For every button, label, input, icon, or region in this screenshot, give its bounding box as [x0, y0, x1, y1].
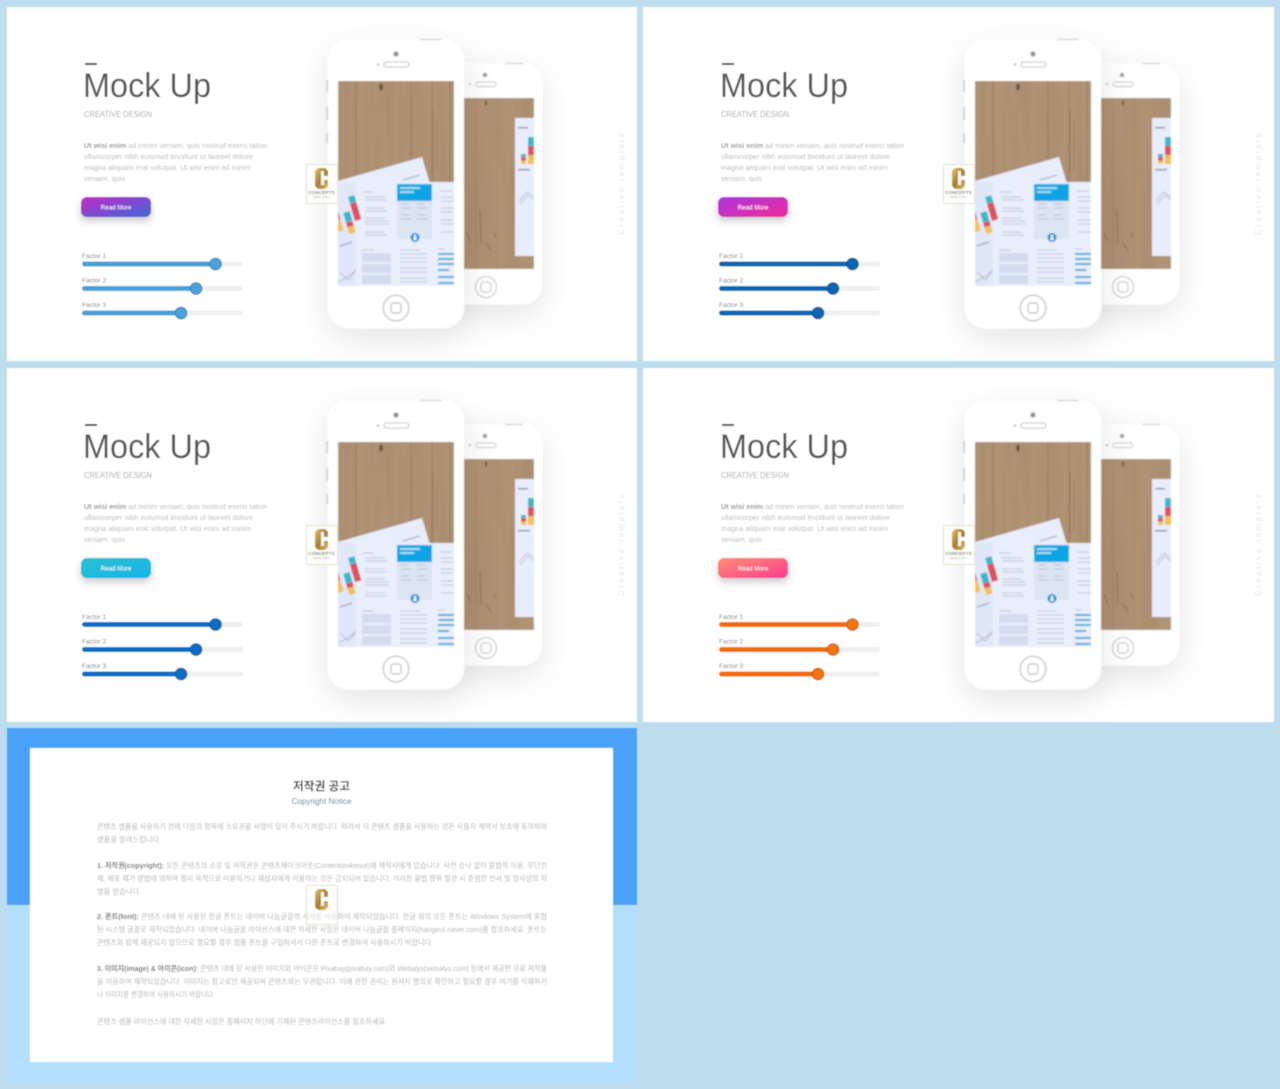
body text: veniam, quis	[721, 174, 762, 183]
slider: factor 3	[719, 302, 880, 319]
button: read more: Read More	[101, 204, 132, 212]
panel: slide 2 magenta	[643, 7, 1274, 361]
title accent dash	[85, 63, 97, 65]
button: read more	[718, 558, 788, 578]
intro paragraph: 샘플을 알려드립니다.	[97, 835, 161, 844]
slider: factor 2: Factor 2	[82, 638, 107, 646]
slider: factor 2: Factor 2	[82, 278, 107, 284]
panel: copyright notice	[7, 728, 637, 1083]
intro paragraph: 콘텐츠 샘플을 사용하기 전에 다음의 항목에 소유권을 사항이 있어 주시기 바랍니다. 따라서 이 콘텐츠 샘플을 사용하는 것은 사용자 계약서 보호에 동의하며	[97, 822, 547, 831]
slider: factor 3: Factor 3	[82, 663, 107, 670]
body text: veniam, quis	[84, 174, 125, 183]
notice subtitle: Copyright Notice	[292, 796, 352, 806]
body text: ullamcorper nibh euismod tincidunt ut laoreet dolore	[721, 152, 890, 161]
subtitle: CREATIVE DESIGN	[721, 470, 789, 480]
logo watermark: CONCEPTS	[308, 190, 336, 196]
panel: slide 4 orange	[643, 368, 1274, 722]
slider: factor 1: Factor 1	[82, 253, 107, 260]
body text: magna aliquam erat volutpat. Ut wisi enim ad minim	[721, 163, 888, 172]
subtitle: CREATIVE DESIGN	[721, 109, 789, 119]
button: read more: Read More	[101, 566, 132, 572]
phone mockups	[327, 39, 542, 328]
section 1: copyright	[97, 861, 547, 896]
logo watermark	[944, 164, 974, 204]
body text: Ut wisi enim ad minim veniam, quis nostrud exerci tation	[721, 502, 904, 511]
title: Mock Up	[83, 428, 211, 466]
slider: factor 3: Factor 3	[719, 302, 744, 309]
button: read more: Read More	[738, 566, 769, 572]
button: read more	[718, 197, 788, 217]
slider: factor 2: Factor 2	[719, 278, 744, 284]
section 1: copyright: 재, 배포 재가 방법에 의하여 영리 목적으로 이용하거나 제삼자에게 이용하는 것은 금지되어 있습니다. 이러한 불법 행위 발견 시 준엄한 민사 및 형사상의 처	[97, 874, 547, 883]
body text: veniam, quis	[721, 535, 762, 544]
slider: factor 3: Factor 3	[82, 302, 107, 309]
title accent dash	[722, 63, 734, 65]
phone mockups	[964, 39, 1179, 328]
section 2: font: 된 시스템 글꼴로 제작되었습니다. 네이버 나눔글꼴 라이선스에 대한 자세한 사항은 네이버 나눔글꼴 홈페이지(hangeul.naver.com)를 참조하세요. 폰트는	[97, 925, 547, 934]
notice title: 저작권 공고	[293, 779, 350, 793]
body text: Ut wisi enim ad minim veniam, quis nostrud exerci tation	[84, 502, 267, 511]
logo watermark: MAKE CONY	[313, 556, 330, 560]
logo watermark: MAKE CONY	[950, 556, 967, 560]
slider: factor 1: Factor 1	[719, 614, 744, 621]
logo watermark	[944, 526, 974, 564]
slider: factor 2	[82, 278, 243, 294]
section 2: font: 2. 폰트(font): 콘텐츠 내에 된 사용된 한글 폰트는 네이버 나눔글꼴의 서체를 사용하여 제작되었습니다. 한글 외의 모든 폰트는 Windows System에 포함	[97, 912, 547, 921]
button: read more: Read More	[738, 204, 769, 212]
body text	[721, 141, 904, 183]
phone mockups	[327, 400, 542, 689]
logo watermark	[306, 164, 338, 204]
phone mockups	[964, 400, 1179, 689]
panel: slide 3 cyan	[7, 368, 637, 722]
slider: factor 1: Factor 1	[719, 253, 744, 260]
section 1: copyright: 벌을 받습니다.	[97, 887, 141, 896]
slider: factor 1	[719, 614, 880, 630]
section 2: font	[97, 912, 547, 947]
slider: factor 3	[82, 663, 243, 680]
body text: ullamcorper nibh euismod tincidunt ut laoreet dolore	[84, 513, 253, 522]
body text: veniam, quis	[84, 535, 125, 544]
body text: ullamcorper nibh euismod tincidunt ut laoreet dolore	[721, 513, 890, 522]
logo watermark: MAKE CONY	[950, 195, 967, 199]
body text	[84, 141, 267, 183]
body text: ullamcorper nibh euismod tincidunt ut laoreet dolore	[84, 152, 253, 161]
slider: factor 1	[82, 253, 243, 270]
button: read more	[81, 558, 151, 578]
body text: magna aliquam erat volutpat. Ut wisi enim ad minim	[721, 524, 888, 533]
section 3: image and icon: 나 이미지를 변경하여 사용하시기 바랍니다.	[97, 990, 215, 999]
slider: factor 2: Factor 2	[719, 638, 744, 646]
body text	[721, 502, 904, 544]
section 3: image and icon: 을 이용하여 제작되었습니다. 이미지는 참고로만 제공되며 콘텐츠와는 무관합니다. 이에 관한 권리는 원저자 명의로 확인하고 필요할 경우 여기를 삭제하거	[97, 977, 547, 986]
subtitle: CREATIVE DESIGN	[84, 470, 152, 480]
section 3: image and icon	[97, 964, 547, 999]
logo watermark: MAKE CONY	[313, 195, 330, 199]
slider: factor 3	[719, 663, 880, 680]
vertical caption: Creative template	[617, 132, 626, 235]
body text: magna aliquam erat volutpat. Ut wisi enim ad minim	[84, 524, 251, 533]
title: Mock Up	[720, 67, 848, 105]
slider: factor 1	[82, 614, 243, 630]
subtitle: CREATIVE DESIGN	[84, 109, 152, 119]
slider: factor 1: Factor 1	[82, 614, 107, 621]
vertical caption: Creative template	[1254, 132, 1263, 235]
body text	[84, 502, 267, 544]
logo watermark: CONCEPTS	[308, 551, 336, 557]
section 2: font: 콘텐츠와 함께 제공되지 않으므로 필요할 경우 정품 폰트를 구입하셔서 다른 폰트로 변경하여 사용하시기 바랍니다.	[97, 938, 433, 947]
logo watermark: CONCEPTS	[945, 190, 973, 196]
slider: factor 3	[82, 302, 243, 319]
title: Mock Up	[720, 428, 848, 466]
slider: factor 1	[719, 253, 880, 270]
panel: slide 1 purple-blue	[7, 7, 637, 361]
button: read more	[81, 197, 151, 217]
logo watermark: CONCEPTS	[945, 551, 973, 557]
vertical caption: Creative template	[1254, 493, 1263, 596]
slider: factor 2	[719, 638, 880, 655]
closing line: 콘텐츠 샘플 라이선스에 대한 자세한 사항은 홈페이지 하단에 기재된 콘텐츠라이선스를 참조하세요.	[97, 1017, 387, 1026]
title accent dash	[85, 424, 97, 426]
vertical caption: Creative template	[617, 493, 626, 596]
slider: factor 2	[82, 638, 243, 655]
title accent dash	[722, 424, 734, 426]
title: Mock Up	[83, 67, 211, 105]
logo watermark	[306, 886, 338, 924]
logo watermark	[306, 526, 338, 564]
body text: magna aliquam erat volutpat. Ut wisi enim ad minim	[84, 163, 251, 172]
body text: Ut wisi enim ad minim veniam, quis nostrud exerci tation	[84, 141, 267, 150]
body text: Ut wisi enim ad minim veniam, quis nostrud exerci tation	[721, 141, 904, 150]
intro paragraph	[97, 822, 547, 844]
slider: factor 2	[719, 278, 880, 294]
slider: factor 3: Factor 3	[719, 663, 744, 670]
section 3: image and icon: 3. 이미지(image) & 아이콘(icon): 콘텐츠 내에 된 사용된 이미지와 아이콘은 Pixabay(pixabay.com)와 Webalys(webalys.com) 등에서 제공한 무료 저작물	[97, 964, 547, 973]
section 1: copyright: 1. 저작권(copyright): 모든 콘텐츠의 소유 및 저작권은 콘텐츠메이크아웃(Contentstokeout)에 제작사에게 있습니다. 사전 승낙 없이 불법적 이용, 무단전	[97, 861, 547, 870]
